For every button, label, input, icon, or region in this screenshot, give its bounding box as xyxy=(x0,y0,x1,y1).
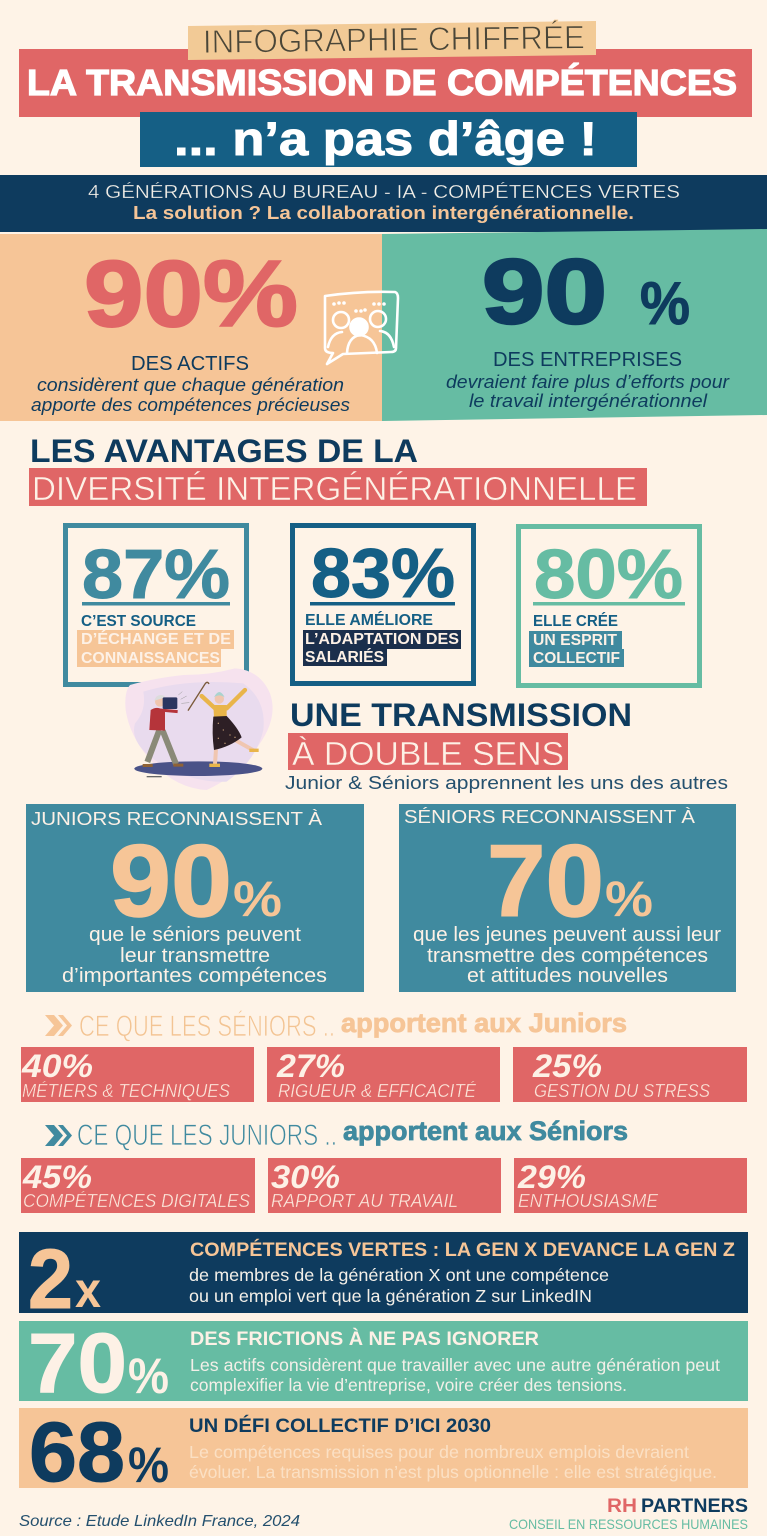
stat: gestion du stress: 25% xyxy=(532,1048,602,1084)
stat card: 83% xyxy=(292,526,474,684)
panel: juniors 90%: que le séniors peuvent xyxy=(89,924,301,946)
stat: métiers & techniques xyxy=(21,1047,254,1102)
source: Source : Etude LinkedIn France, 2024 xyxy=(19,1513,300,1530)
heading: transmission à double sens: À DOUBLE SENS xyxy=(292,735,564,772)
panel: juniors 90%: 90 xyxy=(110,824,232,938)
panel: séniors 70%: transmettre des compétences xyxy=(427,945,708,967)
stat: enthousiasme xyxy=(514,1158,747,1213)
heading: ce que les juniors apportent: CE QUE LES JUNIORS .. xyxy=(77,1119,337,1152)
heading: transmission à double sens: Junior & Séniors apprennent les uns des autres xyxy=(285,773,728,793)
stat: enthousiasme: ENTHOUSIASME xyxy=(518,1191,659,1211)
panel: défi collectif: UN DÉFI COLLECTIF D’ICI 2030 xyxy=(189,1415,491,1437)
heading: avantages de la diversité: DIVERSITÉ INTERGÉNÉRATIONNELLE xyxy=(32,470,637,507)
stat card: 83%: ELLE AMÉLIORE xyxy=(305,610,433,629)
stat card: 87%: CONNAISSANCES xyxy=(81,650,220,667)
panel: séniors 70%: que les jeunes peuvent aussi leur xyxy=(413,924,721,946)
panel: compétences vertes: 2 xyxy=(28,1232,73,1326)
illustration: seniors dancing xyxy=(125,668,273,790)
heading: transmission à double sens: UNE TRANSMISSION xyxy=(290,697,632,733)
stat: enthousiasme: 29% xyxy=(517,1159,586,1195)
stat: compétences digitales: COMPÉTENCES DIGITALES xyxy=(23,1191,250,1211)
panel: frictions: Les actifs considèrent que travailler avec une autre génération peut xyxy=(190,1355,720,1375)
stat: gestion du stress xyxy=(513,1047,747,1102)
stat card: 87%: 87% xyxy=(82,535,230,613)
title banner: la transmission de compétences xyxy=(19,49,752,117)
heading: avantages de la diversité: LES AVANTAGES DE LA xyxy=(30,433,418,469)
stat: compétences digitales xyxy=(21,1158,255,1213)
panel: défi collectif xyxy=(19,1405,748,1499)
stat card: 80% xyxy=(518,526,700,686)
logo: rh partners: CONSEIL EN RESSOURCES HUMAINES xyxy=(509,1516,748,1532)
stat: rapport au travail: RAPPORT AU TRAVAIL xyxy=(271,1191,458,1211)
stat: rapport au travail: 30% xyxy=(271,1159,340,1195)
stat: métiers & techniques: MÉTIERS & TECHNIQUES xyxy=(22,1081,230,1101)
stat card: 80%: ELLE CRÉE xyxy=(533,611,618,630)
icon: group speech bubble xyxy=(325,292,398,364)
panel: séniors 70%: 70 xyxy=(487,824,604,938)
panel: juniors 90% xyxy=(26,804,364,992)
panel: juniors 90%: leur transmettre xyxy=(120,945,270,967)
panel: 90% des actifs: apporte des compétences précieuses xyxy=(31,395,350,415)
stat: métiers & techniques: 40% xyxy=(21,1048,93,1084)
panel: défi collectif: Le compétences requises pour de nombreux emplois devraient xyxy=(189,1442,689,1462)
panel: frictions: complexifier la vie d’entreprise, voire créer des tensions. xyxy=(190,1375,627,1395)
panel: 90% des actifs: DES ACTIFS xyxy=(131,353,249,375)
panel: 90% des entreprises: le travail intergénérationnel xyxy=(469,391,708,411)
panel: défi collectif: 68 xyxy=(29,1405,125,1499)
panel: frictions xyxy=(19,1316,748,1410)
panel: 90% des actifs: 90% xyxy=(84,241,298,346)
heading: ce que les juniors apportent: apportent aux Séniors xyxy=(343,1116,628,1146)
stat card: 87%: D’ÉCHANGE ET DE xyxy=(81,629,231,648)
stat: rapport au travail xyxy=(268,1158,501,1213)
stat card: 80%: 80% xyxy=(534,535,683,613)
logo: rh partners xyxy=(509,1496,748,1532)
heading: transmission à double sens xyxy=(285,697,728,793)
panel: compétences vertes: x xyxy=(75,1262,101,1318)
panel: juniors 90%: JUNIORS RECONNAISSENT À xyxy=(31,809,322,829)
logo: rh partners: RH xyxy=(607,1496,637,1517)
stat card: 80%: UN ESPRIT xyxy=(533,632,617,649)
panel: séniors 70%: et attitudes nouvelles xyxy=(467,965,668,987)
panel: défi collectif: % xyxy=(128,1437,169,1493)
subtitle banner: n'a pas d'âge: ... n’a pas d’âge ! xyxy=(174,112,597,165)
heading: ce que les juniors apportent xyxy=(45,1116,628,1152)
intro band: 4 GÉNÉRATIONS AU BUREAU - IA - COMPÉTENCES VERTES xyxy=(88,181,680,202)
panel: frictions: DES FRICTIONS À NE PAS IGNORER xyxy=(190,1328,539,1350)
panel: 90% des entreprises: devraient faire plus d’efforts pour xyxy=(446,372,730,392)
panel: compétences vertes: COMPÉTENCES VERTES : LA GEN X DEVANCE LA GEN Z xyxy=(190,1239,735,1261)
panel: compétences vertes xyxy=(19,1232,748,1326)
stat card: 80%: COLLECTIF xyxy=(533,650,620,667)
stat: compétences digitales: 45% xyxy=(22,1159,92,1195)
panel: 90% des entreprises: % xyxy=(640,270,690,337)
stat: gestion du stress: GESTION DU STRESS xyxy=(534,1081,710,1101)
stat card: 83%: L’ADAPTATION DES xyxy=(305,631,459,648)
stat card: 83%: SALARIÉS xyxy=(305,647,384,666)
panel: 90% des actifs: considèrent que chaque génération xyxy=(37,375,344,395)
header title block xyxy=(19,18,752,167)
panel: 90% des entreprises: 90 xyxy=(482,241,607,343)
heading: avantages de la diversité xyxy=(29,433,647,507)
panel: compétences vertes: de membres de la génération X ont une compétence xyxy=(189,1265,609,1285)
intro band xyxy=(0,175,767,232)
stat: rigueur & efficacité: 27% xyxy=(276,1048,345,1084)
heading: ce que les séniors apportent: apportent aux Juniors xyxy=(341,1008,627,1038)
stat card: 87% xyxy=(66,526,246,684)
intro band: La solution ? La collaboration intergénérationnelle. xyxy=(133,203,634,223)
panel: défi collectif: évoluer. La transmission n’est plus optionnelle : elle est stratégique. xyxy=(189,1462,717,1482)
panel: frictions: 70 xyxy=(28,1316,127,1410)
panel: frictions: % xyxy=(128,1348,169,1404)
panel: 90% des entreprises: DES ENTREPRISES xyxy=(493,349,682,371)
heading: ce que les séniors apportent: CE QUE LES SÉNIORS .. xyxy=(79,1010,335,1043)
panel: compétences vertes: ou un emploi vert que la génération Z sur LinkedIN xyxy=(189,1286,592,1306)
title banner: la transmission de compétences: LA TRANSMISSION DE COMPÉTENCES xyxy=(27,62,737,103)
panel: 90% des actifs xyxy=(0,234,382,421)
panel: juniors 90%: d’importantes compétences xyxy=(62,965,327,987)
panel: séniors 70% xyxy=(399,804,736,992)
panel: séniors 70%: SÉNIORS RECONNAISSENT À xyxy=(404,807,695,827)
stat: rigueur & efficacité xyxy=(267,1047,500,1102)
stat: rigueur & efficacité: RIGUEUR & EFFICACITÉ xyxy=(278,1081,477,1101)
heading: ce que les séniors apportent xyxy=(45,1008,627,1043)
panel: séniors 70%: % xyxy=(605,871,653,927)
tag: infographie chiffrée: INFOGRAPHIE CHIFFRÉE xyxy=(203,18,585,60)
panel: juniors 90%: % xyxy=(233,871,282,927)
stat card: 87%: C’EST SOURCE xyxy=(81,613,196,630)
panel: 90% des entreprises xyxy=(382,229,767,421)
logo: rh partners: PARTNERS xyxy=(641,1496,748,1517)
stat card: 83%: 83% xyxy=(311,534,455,612)
